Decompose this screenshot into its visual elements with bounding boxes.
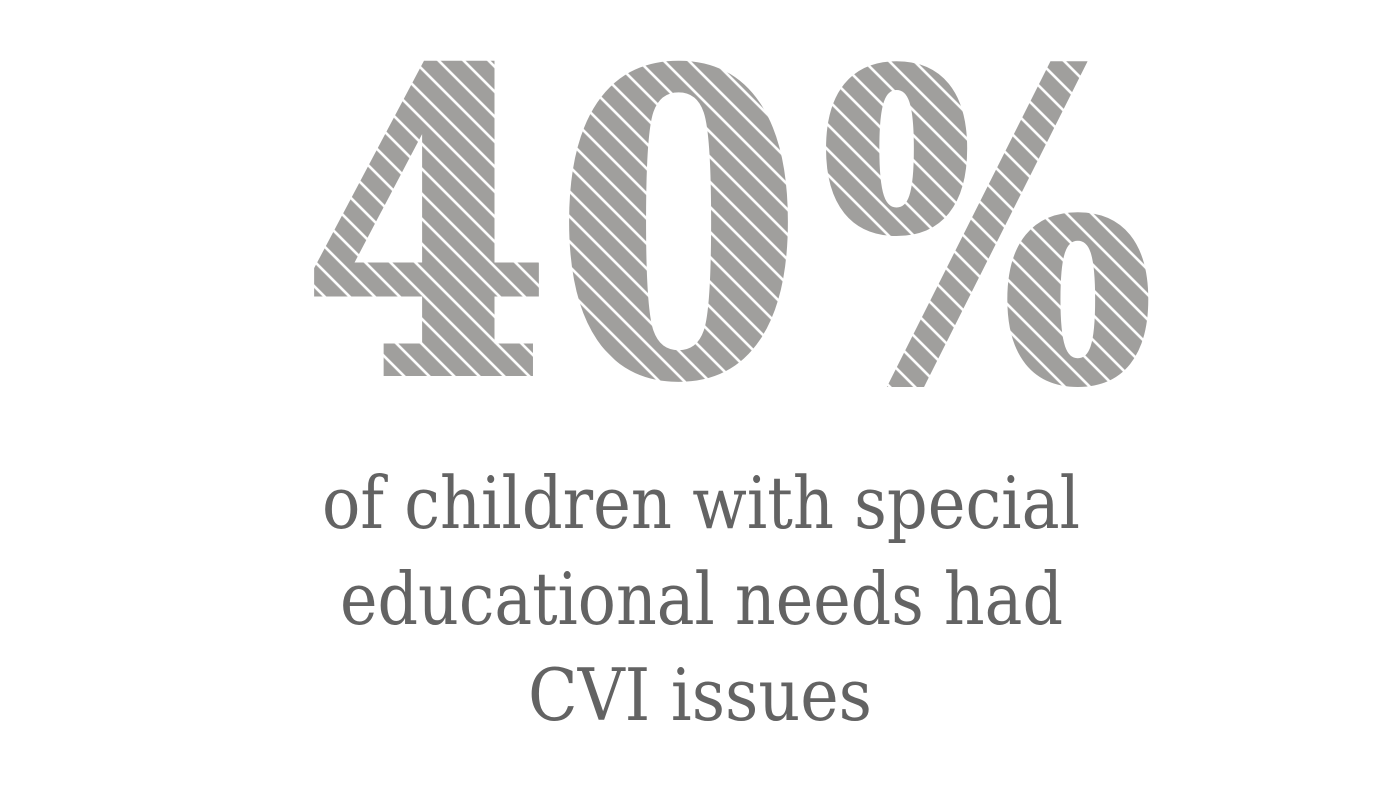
caption line 3: CVI issues [528, 653, 872, 737]
caption line 2: educational needs had [340, 557, 1063, 641]
caption line 1: of children with special [322, 461, 1080, 545]
caption text [322, 461, 1080, 737]
big number: 40% [303, 0, 1154, 477]
